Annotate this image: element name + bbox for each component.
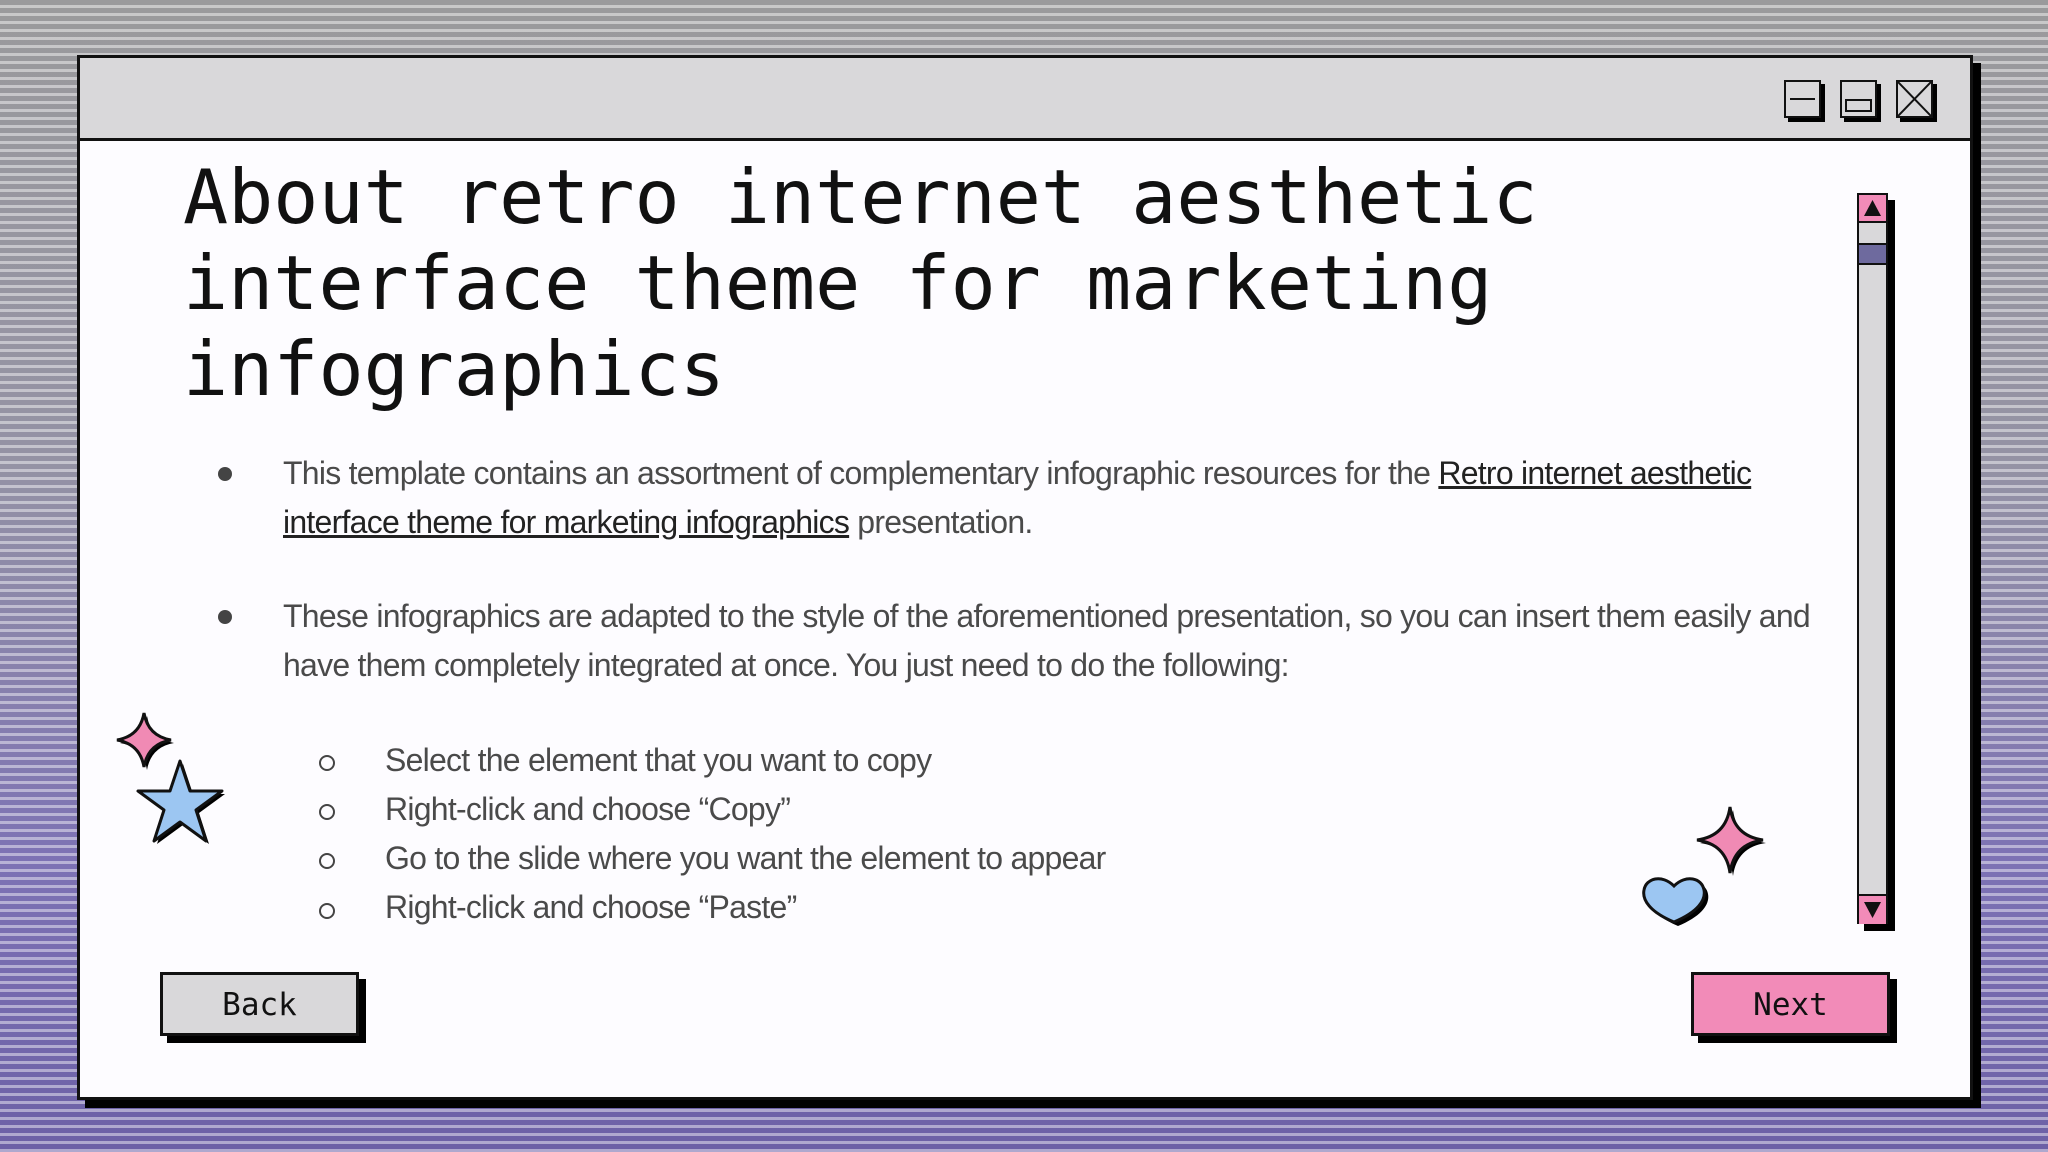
scrollbar <box>1857 193 1888 924</box>
scroll down arrow <box>1859 894 1886 924</box>
bullet list: Go to the slide where you want the element to appear <box>385 840 1106 876</box>
bullet list: Right-click and choose “Paste” <box>385 889 796 925</box>
button: next <box>1691 972 1890 1036</box>
bullet 1 <box>218 467 232 481</box>
button: back <box>160 972 359 1036</box>
icon: pink sparkle left <box>116 712 174 770</box>
icon: minimize <box>1784 80 1821 118</box>
button: next: Next <box>1753 987 1828 1023</box>
title: interface theme for marketing <box>183 239 1492 327</box>
title: infographics <box>183 325 725 413</box>
icon: heart <box>1642 877 1708 926</box>
scroll up arrow <box>1859 195 1886 223</box>
bullet list: interface theme for marketing infographics presentation. <box>283 504 1033 540</box>
title: About retro internet aesthetic <box>183 153 1538 241</box>
bullet list: This template contains an assortment of complementary infographic resources for the Retro internet aesthetic <box>283 455 1751 491</box>
bullet list: Right-click and choose “Copy” <box>385 791 790 827</box>
icon: close <box>1896 80 1933 118</box>
title bar <box>80 58 1970 141</box>
icon: maximize <box>1840 80 1877 118</box>
icon: pink sparkle right <box>1696 806 1766 876</box>
scroll thumb <box>1859 243 1886 265</box>
sub-bullets <box>319 755 335 771</box>
title <box>183 153 1538 413</box>
bullet list: These infographics are adapted to the style of the aforementioned presentation, so you can insert them easily and <box>283 598 1810 634</box>
bullet list: Select the element that you want to copy <box>385 742 931 778</box>
bullet 2 <box>218 610 232 624</box>
button: back: Back <box>222 987 297 1023</box>
bullet list: have them completely integrated at once. You just need to do the following: <box>283 647 1289 683</box>
icon: blue star <box>136 760 225 844</box>
